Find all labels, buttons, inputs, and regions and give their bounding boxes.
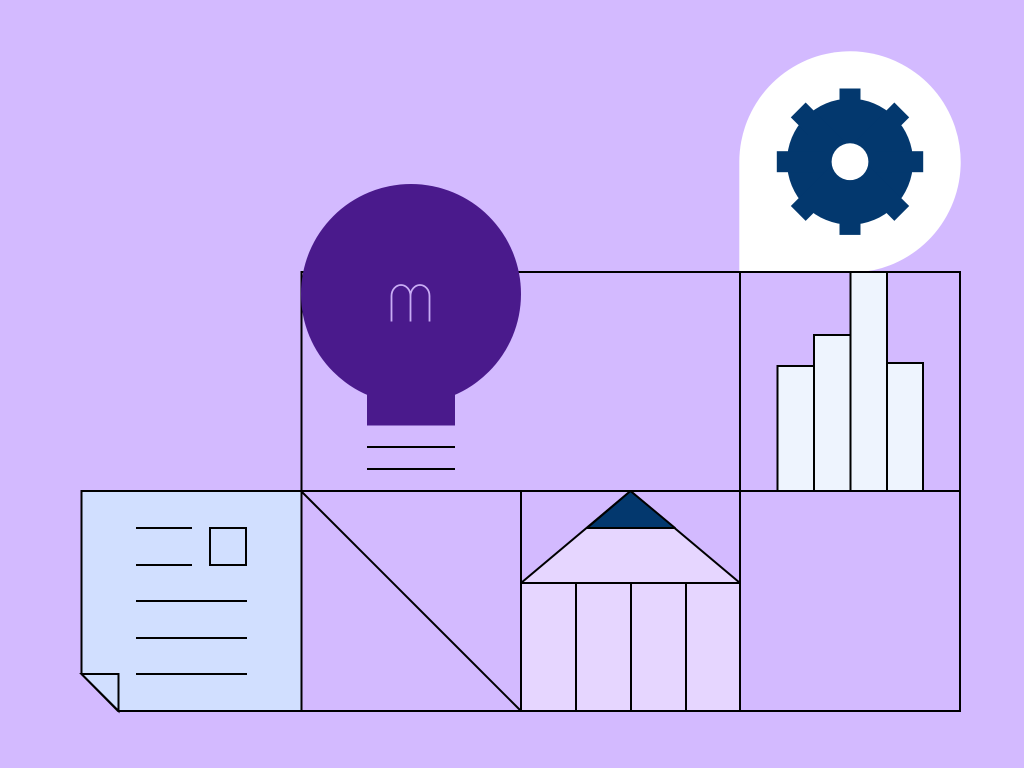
- icon: pencil: [521, 491, 740, 711]
- folded corner: [82, 674, 118, 711]
- image placeholder: [210, 528, 246, 565]
- filament: [392, 285, 430, 322]
- bar 4: [887, 363, 923, 491]
- bulb glass: [301, 184, 521, 404]
- icon: light bulb: [301, 184, 521, 491]
- pencil body: [521, 583, 740, 711]
- panel: bar chart cell: [740, 272, 960, 491]
- speech bubble: [739, 51, 961, 272]
- panel: light bulb cell: [302, 272, 740, 491]
- bar 3: [850, 272, 887, 491]
- pencil sharpened cone: [521, 491, 740, 583]
- bar 2: [814, 335, 850, 491]
- document page: [82, 491, 302, 711]
- icon: document: [82, 491, 302, 711]
- bar 1: [778, 366, 814, 491]
- text lines: [136, 528, 247, 674]
- bulb thread lines: [367, 447, 455, 491]
- pencil tip: [587, 491, 675, 528]
- gear hole: [832, 143, 868, 180]
- panel: bottom grid row: [301, 491, 960, 711]
- bulb base: [367, 385, 455, 426]
- diagonal cell line: [301, 491, 521, 711]
- pencil body dividers: [576, 583, 686, 711]
- gear: [777, 88, 923, 235]
- bar chart: [778, 272, 923, 491]
- icon: speech bubble with gear: [739, 51, 961, 272]
